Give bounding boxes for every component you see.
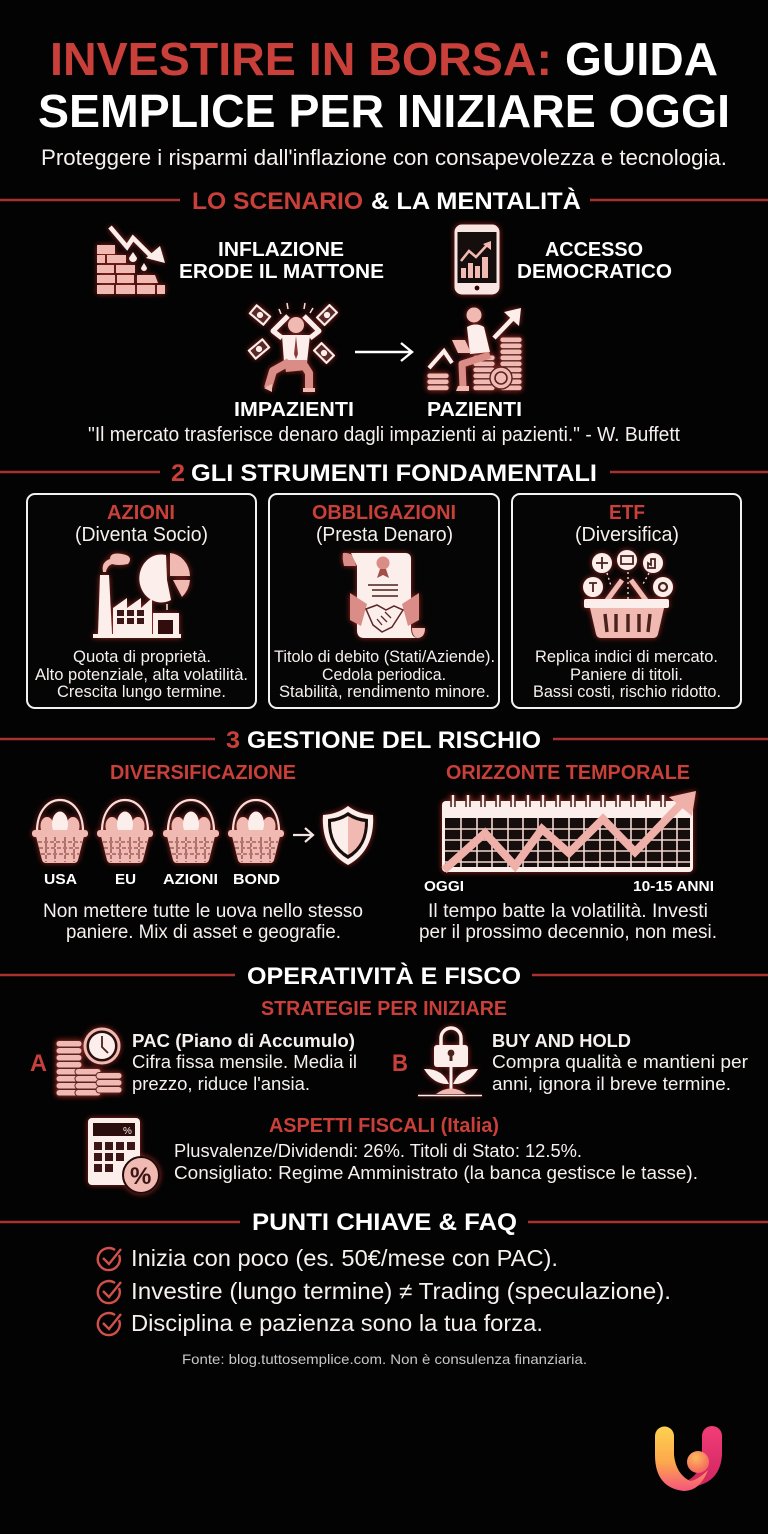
label: pazienti: PAZIENTI bbox=[427, 399, 522, 421]
letter A: A bbox=[30, 1050, 47, 1077]
panel: azioni: Quota di proprietà. bbox=[73, 648, 211, 666]
icon: eroding brick wall bbox=[97, 227, 165, 294]
icon: factory and pie chart bbox=[93, 553, 190, 638]
text: accesso bbox=[517, 239, 672, 283]
icon: four egg baskets bbox=[32, 800, 284, 863]
section heading: scenario: LO SCENARIO bbox=[192, 188, 363, 215]
icon: padlock and plant bbox=[418, 1028, 482, 1096]
section heading: strumenti: GLI STRUMENTI FONDAMENTALI bbox=[191, 460, 597, 487]
heading: strategie: STRATEGIE PER INIZIARE bbox=[261, 998, 507, 1020]
section heading: rischio: GESTIONE DEL RISCHIO bbox=[247, 727, 541, 754]
icon: shield bbox=[323, 806, 373, 865]
icon: calculator bbox=[88, 1118, 159, 1193]
list: key point two: Investire (lungo termine) ≠ Trading (speculazione). bbox=[131, 1278, 671, 1304]
title: SEMPLICE PER INIZIARE OGGI bbox=[38, 85, 730, 137]
text: pac: prezzo, riduce l'ansia. bbox=[132, 1073, 310, 1094]
icon: impatient man with money bbox=[247, 303, 338, 392]
labels: timeline: 10-15 ANNI bbox=[633, 879, 714, 895]
text: time horizon note: per il prossimo decennio, non mesi. bbox=[419, 922, 717, 943]
text: pac: PAC (Piano di Accumulo) bbox=[132, 1030, 355, 1051]
icon: bond scroll and handshake bbox=[343, 553, 425, 638]
panel: obbligazioni: (Presta Denaro) bbox=[316, 524, 453, 546]
heading: orizzonte temporale: ORIZZONTE TEMPORALE bbox=[446, 762, 690, 784]
logo bbox=[655, 1426, 722, 1491]
arrow: impatient to patient bbox=[355, 343, 412, 361]
icon: patient investor on coins bbox=[427, 308, 522, 391]
section heading: rischio: 3 bbox=[226, 727, 240, 754]
panel: etf: ETF bbox=[609, 502, 645, 524]
panel: etf: Paniere di titoli. bbox=[570, 666, 683, 684]
text: accesso: ACCESSO bbox=[545, 239, 643, 261]
panel: azioni: Alto potenziale, alta volatilità. bbox=[35, 666, 248, 684]
section heading: scenario: & LA MENTALITÀ bbox=[371, 187, 581, 215]
source note: Fonte: blog.tuttosemplice.com. Non è consulenza finanziaria. bbox=[182, 1351, 587, 1367]
text: buy and hold: Compra qualità e mantieni per bbox=[492, 1051, 748, 1072]
labels: timeline bbox=[424, 879, 714, 895]
panel: etf bbox=[512, 494, 741, 708]
text: inflazione: ERODE IL MATTONE bbox=[179, 261, 384, 283]
section heading: scenario bbox=[192, 187, 581, 215]
text: inflazione: INFLAZIONE bbox=[218, 239, 344, 261]
title bbox=[38, 33, 730, 137]
section heading: strumenti: 2 bbox=[171, 460, 185, 487]
panel: obbligazioni: OBBLIGAZIONI bbox=[312, 502, 456, 524]
panel: azioni bbox=[27, 494, 256, 708]
icon: calendar with rising line bbox=[442, 791, 696, 872]
labels: basket names: BOND bbox=[233, 872, 280, 888]
panel: azioni: (Diventa Socio) bbox=[75, 524, 208, 546]
panel: etf: Replica indici di mercato. bbox=[535, 648, 718, 666]
text: buy and hold bbox=[492, 1030, 748, 1094]
labels: timeline: OGGI bbox=[424, 879, 464, 895]
labels: basket names: EU bbox=[115, 872, 136, 888]
text: buy and hold: BUY AND HOLD bbox=[492, 1030, 631, 1051]
label: impazienti: IMPAZIENTI bbox=[234, 399, 354, 421]
panel: etf: (Diversifica) bbox=[575, 524, 679, 546]
panel: obbligazioni bbox=[269, 494, 499, 708]
title: GUIDA bbox=[565, 33, 718, 85]
labels: basket names: USA bbox=[44, 872, 78, 888]
text: diversification note: paniere. Mix di asset e geografie. bbox=[66, 922, 341, 943]
title: INVESTIRE IN BORSA: bbox=[50, 33, 552, 85]
list: key point three: Disciplina e pazienza sono la tua forza. bbox=[131, 1310, 543, 1336]
icon: phone with chart bbox=[456, 226, 498, 293]
text: tax details bbox=[174, 1140, 698, 1183]
text: tax details: Plusvalenze/Dividendi: 26%. Titoli di Stato: 12.5%. bbox=[174, 1140, 582, 1161]
text: tax details: Consigliato: Regime Amministrato (la banca gestisce le tasse). bbox=[174, 1162, 698, 1183]
panel: azioni: AZIONI bbox=[107, 502, 175, 524]
text: time horizon note bbox=[419, 901, 717, 943]
text: pac: Cifra fissa mensile. Media il bbox=[132, 1051, 357, 1072]
labels: basket names bbox=[44, 872, 280, 888]
text: diversification note bbox=[43, 901, 363, 943]
text: inflazione bbox=[179, 239, 384, 283]
section heading: operativita: OPERATIVITÀ E FISCO bbox=[247, 962, 521, 990]
subtitle: Proteggere i risparmi dall'inflazione con consapevolezza e tecnologia. bbox=[41, 145, 727, 170]
panel: obbligazioni: Stabilità, rendimento minore. bbox=[279, 683, 490, 701]
letter B: B bbox=[392, 1050, 408, 1077]
quote: "Il mercato trasferisce denaro dagli impazienti ai pazienti." - W. Buffett bbox=[88, 424, 680, 446]
heading: diversificazione: DIVERSIFICAZIONE bbox=[110, 762, 296, 784]
text: buy and hold: anni, ignora il breve termine. bbox=[492, 1073, 731, 1094]
icon: calculator: % bbox=[123, 1126, 132, 1137]
list: key point one: Inizia con poco (es. 50€/mese con PAC). bbox=[131, 1245, 558, 1271]
arrow: baskets to shield bbox=[293, 828, 313, 842]
panel: obbligazioni: Cedola periodica. bbox=[322, 666, 446, 684]
text: diversification note: Non mettere tutte le uova nello stesso bbox=[43, 901, 363, 922]
text: time horizon note: Il tempo batte la volatilità. Investi bbox=[428, 901, 708, 922]
labels: basket names: AZIONI bbox=[163, 872, 218, 888]
section heading: punti chiave: PUNTI CHIAVE & FAQ bbox=[252, 1209, 517, 1236]
text: accesso: DEMOCRATICO bbox=[517, 261, 672, 283]
icon: calculator: % bbox=[130, 1163, 151, 1190]
icon: coins and clock bbox=[56, 1029, 122, 1096]
text: pac bbox=[132, 1030, 357, 1094]
panel: azioni: Crescita lungo termine. bbox=[57, 683, 226, 701]
panel: etf: Bassi costi, rischio ridotto. bbox=[533, 683, 721, 701]
icon: etf basket bbox=[583, 550, 673, 638]
heading: aspetti fiscali: ASPETTI FISCALI (Italia) bbox=[269, 1115, 499, 1137]
panel: obbligazioni: Titolo di debito (Stati/Aziende). bbox=[274, 648, 495, 666]
